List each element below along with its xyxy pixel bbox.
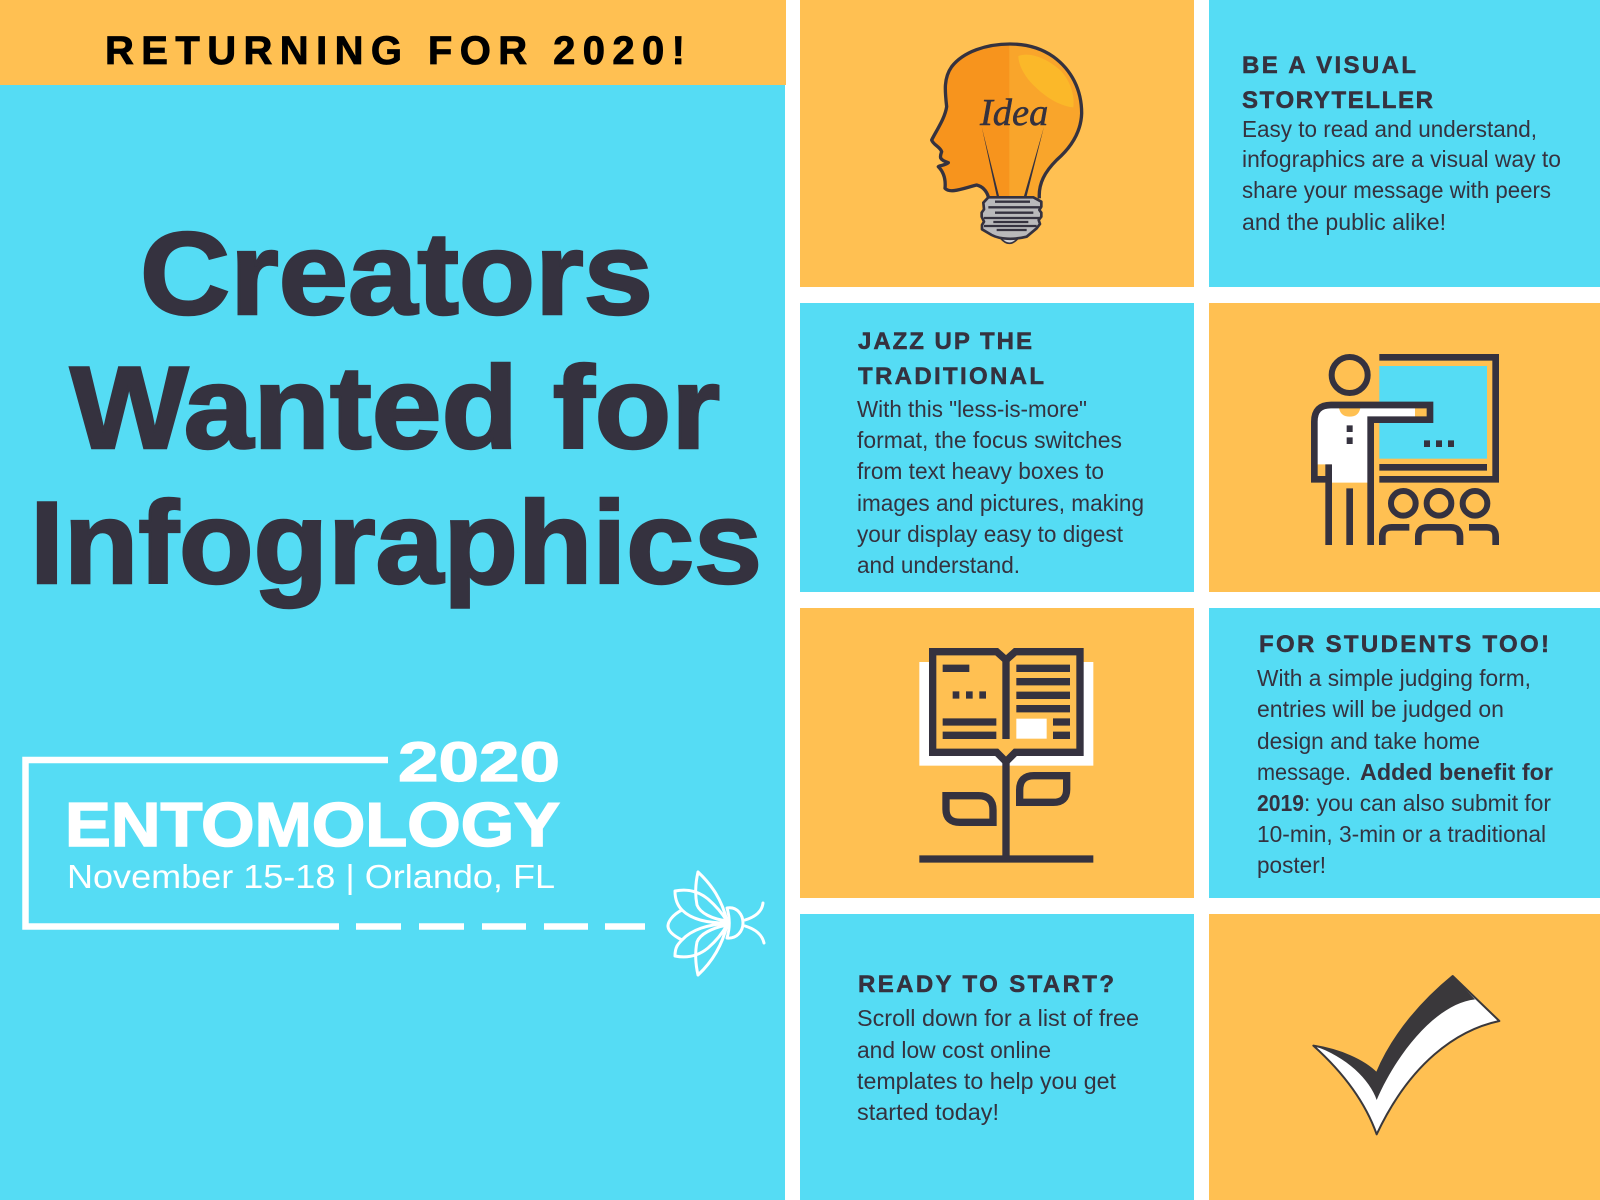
body text: and low cost online: [857, 1037, 1051, 1063]
heading: JAZZ UP THE: [858, 328, 1032, 355]
panel: for students too: [1209, 608, 1600, 898]
icon: checkmark: [1313, 976, 1499, 1134]
title: Creators: [140, 208, 653, 339]
body text: 10-min, 3-min or a traditional: [1257, 821, 1546, 847]
icon: moth: [668, 872, 764, 975]
icon: head lightbulb: Idea: [979, 92, 1048, 134]
heading: BE A VISUAL: [1242, 52, 1416, 79]
body text: [1242, 116, 1561, 235]
body text: message.: [1257, 759, 1351, 785]
panel: left main: [0, 0, 786, 1200]
body text: design and take home: [1257, 728, 1480, 754]
body text: your display easy to digest: [857, 521, 1124, 547]
body text: 2019: [1257, 790, 1304, 816]
body text: Scroll down for a list of free: [857, 1005, 1139, 1031]
heading: STORYTELLER: [1242, 87, 1433, 114]
body text: Added benefit for: [1360, 759, 1553, 785]
panel: jazz up the traditional: [800, 303, 1194, 592]
body text: share your message with peers: [1242, 177, 1551, 203]
logo year: 2020: [398, 730, 560, 793]
body text: With a simple judging form,: [1257, 665, 1531, 691]
panel: lightbulb tile: [800, 0, 1194, 287]
logo frame: [26, 760, 645, 926]
panel: presenter tile: [1209, 303, 1600, 592]
body text: and the public alike!: [1242, 209, 1446, 235]
body text: started today!: [857, 1099, 999, 1125]
body text: [1257, 665, 1553, 878]
logo name: ENTOMOLOGY: [65, 791, 560, 860]
icon: book plant: [919, 652, 1093, 860]
panel: checkmark tile: [1209, 914, 1600, 1200]
icon: head lightbulb: [932, 44, 1082, 243]
body text: [857, 396, 1144, 578]
banner: RETURNING FOR 2020!: [105, 29, 685, 73]
panel: book tile: [800, 608, 1194, 898]
body text: [857, 1005, 1139, 1125]
title: [30, 208, 762, 608]
icon: presenter with audience: [1314, 357, 1496, 545]
body text: entries will be judged on: [1257, 696, 1504, 722]
body text: images and pictures, making: [857, 490, 1144, 516]
body text: format, the focus switches: [857, 427, 1122, 453]
body text: infographics are a visual way to: [1242, 146, 1561, 172]
body text: poster!: [1257, 852, 1326, 878]
body text: : you can also submit for: [1304, 790, 1551, 816]
heading: TRADITIONAL: [858, 363, 1044, 390]
logo date and place: November 15-18 | Orlando, FL: [67, 858, 555, 895]
logo: Entomology 2020: [26, 730, 764, 975]
heading: [1242, 52, 1433, 114]
body text: Easy to read and understand,: [1242, 116, 1537, 142]
title: Infographics: [30, 477, 762, 608]
body text: from text heavy boxes to: [857, 458, 1104, 484]
heading: [858, 328, 1044, 390]
banner: [0, 0, 786, 85]
body text: and understand.: [857, 552, 1020, 578]
panel: be a visual storyteller: [1209, 0, 1600, 287]
body text: templates to help you get: [857, 1068, 1117, 1094]
panel: ready to start: [800, 914, 1194, 1200]
body text: With this "less-is-more": [857, 396, 1087, 422]
title: Wanted for: [70, 342, 720, 473]
heading: READY TO START?: [858, 971, 1114, 998]
heading: FOR STUDENTS TOO!: [1259, 631, 1549, 658]
